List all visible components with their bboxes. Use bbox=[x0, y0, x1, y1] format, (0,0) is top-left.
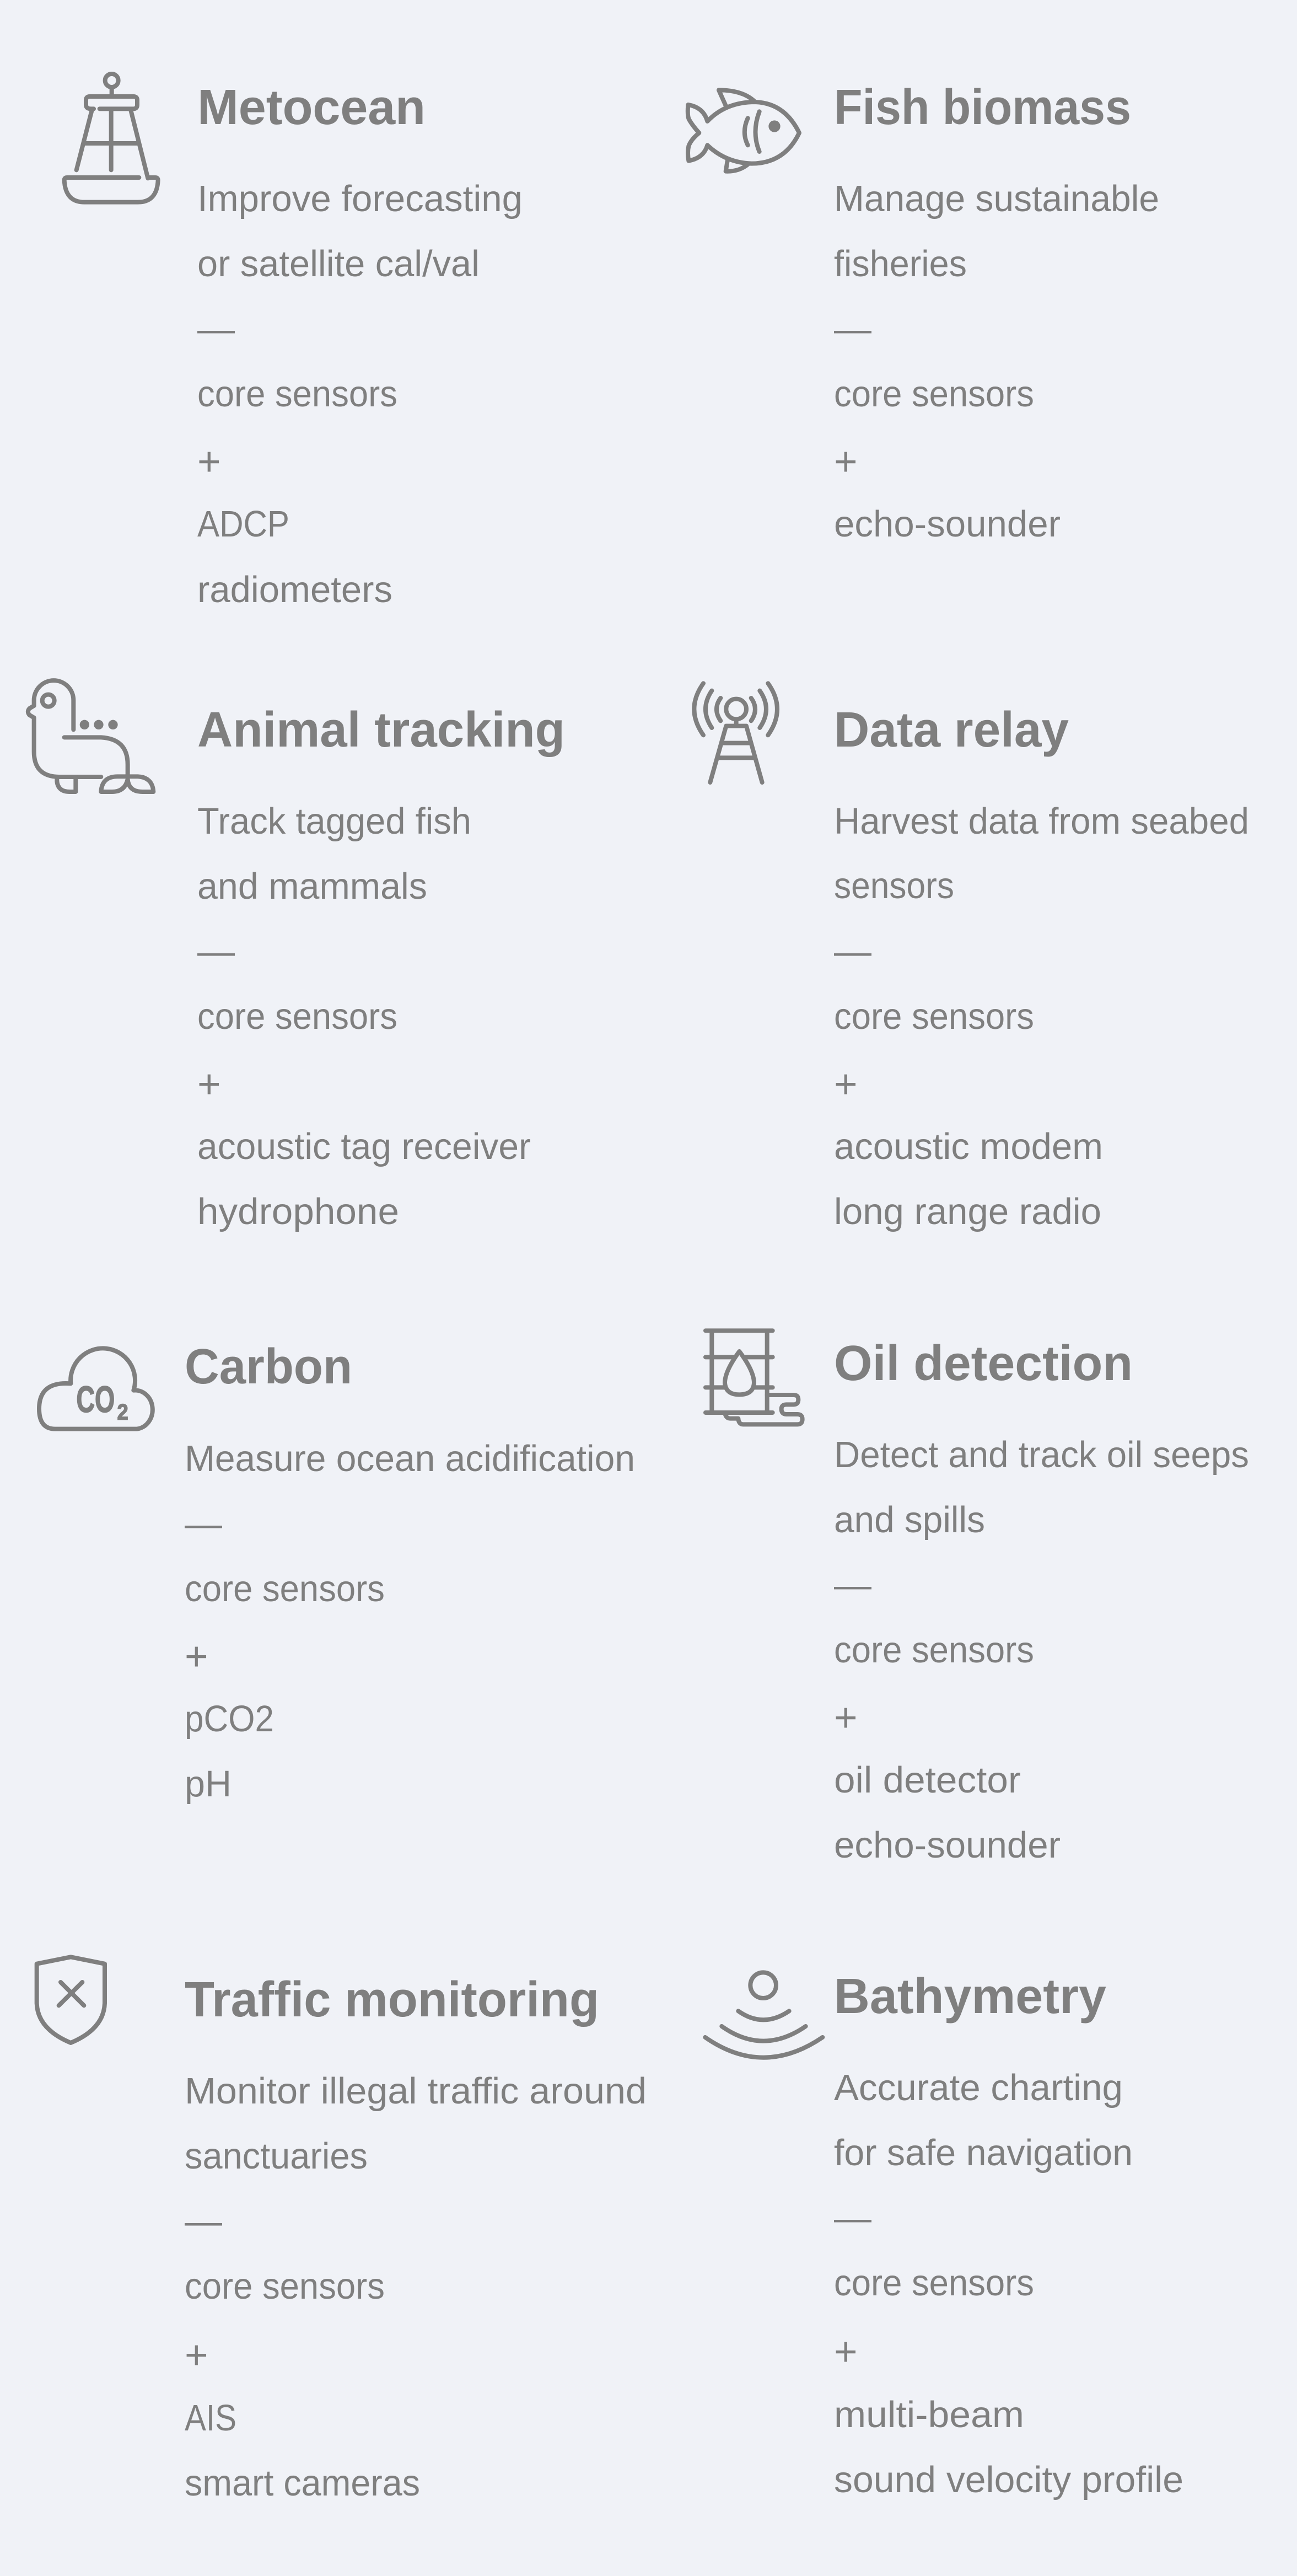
text block: Oil detection: + bbox=[834, 1695, 858, 1740]
panel: Fish biomass bbox=[688, 80, 1159, 545]
text block: Metocean: core sensors bbox=[197, 373, 397, 415]
panel: Metocean bbox=[64, 74, 523, 610]
text block: Oil detection: echo-sounder bbox=[834, 1824, 1061, 1866]
text block: Metocean: + bbox=[197, 439, 221, 484]
heading: Traffic monitoring: Traffic monitoring bbox=[185, 1972, 599, 2027]
panel: Bathymetry bbox=[705, 1969, 1183, 2500]
heading: Oil detection: Oil detection bbox=[834, 1336, 1133, 1391]
text block: Bathymetry: core sensors bbox=[834, 2262, 1034, 2304]
text block: Animal tracking: hydrophone bbox=[197, 1191, 399, 1232]
text block: Carbon: Measure ocean acidification bbox=[185, 1438, 635, 1479]
text block: Bathymetry: Accurate charting bbox=[834, 2067, 1123, 2108]
text block: Metocean: — bbox=[197, 308, 235, 350]
panel: Animal tracking bbox=[28, 680, 565, 1232]
panel: Carbon bbox=[39, 1339, 635, 1805]
icon: CO2 cloud: CO bbox=[76, 1380, 115, 1420]
text block: Carbon: core sensors bbox=[185, 1568, 385, 1609]
icon: oil barrel bbox=[706, 1330, 803, 1424]
text block: Data relay bbox=[834, 801, 1249, 1232]
text block: Carbon bbox=[185, 1438, 635, 1805]
text block: Data relay: sensors bbox=[834, 865, 954, 906]
text block: Oil detection: — bbox=[834, 1564, 871, 1606]
text block: Fish biomass: Manage sustainable bbox=[834, 178, 1159, 219]
text block: Oil detection: Detect and track oil seeps bbox=[834, 1434, 1249, 1475]
heading: Fish biomass: Fish biomass bbox=[834, 80, 1131, 135]
text block: Oil detection: core sensors bbox=[834, 1629, 1034, 1671]
text block: Fish biomass: core sensors bbox=[834, 373, 1034, 415]
text block: Fish biomass: — bbox=[834, 308, 871, 350]
text block: Animal tracking: acoustic tag receiver bbox=[197, 1126, 531, 1167]
text block: Bathymetry bbox=[834, 2067, 1183, 2500]
text block: Data relay: Harvest data from seabed bbox=[834, 801, 1249, 842]
text block: Traffic monitoring: — bbox=[185, 2201, 222, 2242]
text block: Oil detection bbox=[834, 1434, 1249, 1866]
text block: Animal tracking: Track tagged fish bbox=[197, 801, 471, 842]
text block: Animal tracking bbox=[197, 801, 531, 1232]
heading: Bathymetry: Bathymetry bbox=[834, 1969, 1106, 2024]
text block: Oil detection: and spills bbox=[834, 1499, 985, 1541]
text block: Traffic monitoring: sanctuaries bbox=[185, 2135, 368, 2177]
text block: Metocean bbox=[197, 178, 523, 610]
icon: CO2 cloud bbox=[39, 1348, 153, 1429]
text block: Carbon: — bbox=[185, 1503, 222, 1544]
text block: Carbon: pH bbox=[185, 1763, 232, 1805]
text block: Metocean: ADCP bbox=[197, 503, 289, 545]
text block: Bathymetry: for safe navigation bbox=[834, 2132, 1133, 2174]
text block: Metocean: radiometers bbox=[197, 569, 392, 610]
text block: Bathymetry: multi-beam bbox=[834, 2394, 1024, 2435]
icon: radio tower bbox=[694, 683, 777, 782]
text block: Traffic monitoring bbox=[185, 2070, 647, 2504]
heading: Carbon: Carbon bbox=[185, 1339, 352, 1394]
text block: Data relay: + bbox=[834, 1062, 858, 1107]
icon: shield with cross bbox=[37, 1957, 105, 2043]
icon: sonar bbox=[705, 1972, 822, 2058]
text block: Bathymetry: + bbox=[834, 2330, 858, 2374]
heading: Data relay: Data relay bbox=[834, 702, 1069, 758]
text block: Metocean: Improve forecasting bbox=[197, 178, 523, 219]
text block: Animal tracking: and mammals bbox=[197, 866, 427, 907]
text block: Fish biomass: echo-sounder bbox=[834, 503, 1061, 545]
text block: Data relay: — bbox=[834, 931, 871, 972]
text block: Data relay: acoustic modem bbox=[834, 1126, 1103, 1167]
text block: Carbon: pCO2 bbox=[185, 1698, 274, 1740]
text block: Fish biomass bbox=[834, 178, 1159, 545]
text block: Fish biomass: fisheries bbox=[834, 243, 967, 285]
heading: Animal tracking: Animal tracking bbox=[197, 702, 565, 758]
heading: Metocean: Metocean bbox=[197, 80, 426, 135]
text block: Animal tracking: — bbox=[197, 931, 235, 972]
text block: Carbon: + bbox=[185, 1634, 208, 1679]
text block: Bathymetry: — bbox=[834, 2197, 871, 2239]
text block: Fish biomass: + bbox=[834, 439, 858, 484]
text block: Bathymetry: sound velocity profile bbox=[834, 2459, 1183, 2500]
icon: seal bbox=[28, 680, 153, 792]
text block: Animal tracking: core sensors bbox=[197, 996, 397, 1037]
text block: Data relay: long range radio bbox=[834, 1191, 1101, 1232]
text block: Traffic monitoring: + bbox=[185, 2333, 208, 2378]
text block: Traffic monitoring: AIS bbox=[185, 2397, 236, 2439]
icon: CO2 cloud: 2 bbox=[117, 1400, 128, 1424]
text block: Traffic monitoring: smart cameras bbox=[185, 2462, 420, 2504]
text block: Metocean: or satellite cal/val bbox=[197, 243, 480, 285]
text block: Oil detection: oil detector bbox=[834, 1759, 1021, 1801]
panel: Data relay bbox=[694, 683, 1249, 1232]
panel: Traffic monitoring bbox=[37, 1957, 647, 2504]
text block: Traffic monitoring: core sensors bbox=[185, 2266, 385, 2307]
text block: Data relay: core sensors bbox=[834, 996, 1034, 1037]
text block: Animal tracking: + bbox=[197, 1062, 221, 1107]
icon: buoy bbox=[64, 74, 158, 202]
text block: Traffic monitoring: Monitor illegal traffic around bbox=[185, 2070, 647, 2112]
panel: Oil detection bbox=[706, 1330, 1249, 1866]
icon: fish bbox=[688, 90, 799, 171]
